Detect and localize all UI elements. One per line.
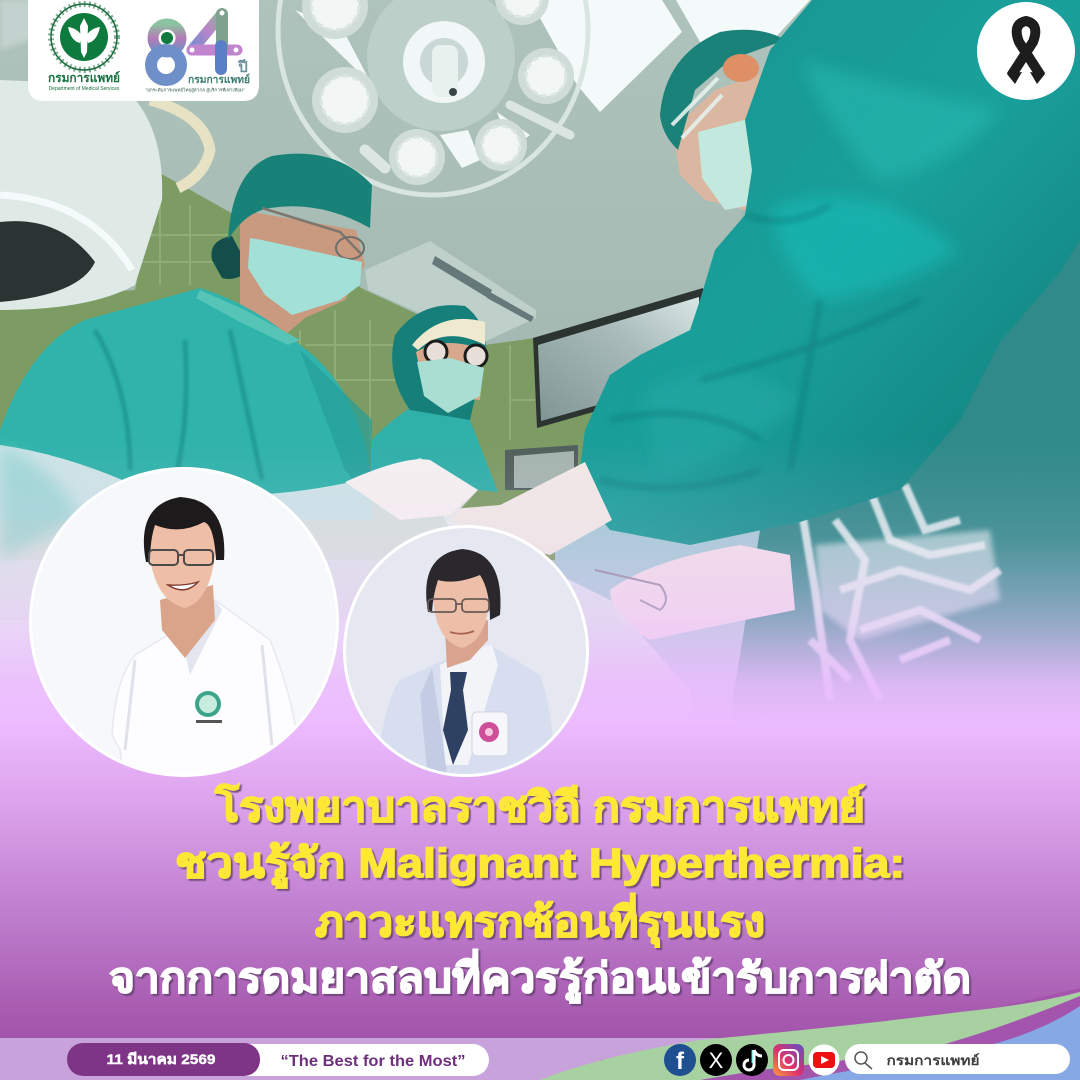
- logo: Ministry of Public Health: [48, 4, 120, 92]
- shirt badge: [195, 691, 221, 717]
- logo: 84 years: [146, 10, 250, 94]
- icon: facebook: f: [676, 1048, 685, 1075]
- neck and face: [445, 620, 488, 668]
- title line 3: ภาวะแทรกซ้อนที่รุนแรง: [315, 893, 765, 948]
- icon: YouTube: [808, 1044, 840, 1076]
- slogan: “The Best for the Most”: [280, 1053, 466, 1070]
- ceiling: [0, 0, 1080, 620]
- front left surgeon: [0, 154, 372, 520]
- glasses: [149, 550, 213, 565]
- logo: Ministry of Public Health: กรมการแพทย์: [48, 71, 120, 85]
- air conditioner unit: [365, 241, 536, 342]
- smile: [168, 582, 198, 590]
- right surgeon gown: [577, 0, 1080, 545]
- face: [160, 585, 215, 658]
- portrait: right doctor: [340, 520, 590, 790]
- tie: [443, 672, 468, 765]
- logo: 84 years: กรมการแพทย์: [188, 73, 250, 86]
- back surgeon gown: [372, 405, 498, 492]
- right surgeon lower body: [720, 225, 1080, 780]
- date and slogan pill: [67, 1043, 489, 1076]
- pocket badge: [472, 712, 508, 756]
- title: [109, 783, 971, 1004]
- title line 2: ชวนรู้จัก Malignant Hyperthermia:: [175, 840, 905, 889]
- date: 11 มีนาคม 2569: [106, 1051, 216, 1067]
- title line 4: จากการดมยาสลบที่ควรรู้ก่อนเข้ารับการผ่าตัด: [109, 949, 971, 1004]
- icon: facebook: [664, 1044, 696, 1076]
- date pill: [67, 1043, 260, 1076]
- ceiling light panels: [530, 0, 810, 112]
- back surgeon head: [392, 305, 487, 420]
- portrait: left doctor: [29, 467, 339, 777]
- mourning ribbon badge: [977, 2, 1075, 100]
- mouth: [450, 631, 474, 634]
- white coat: [381, 645, 552, 774]
- hair: [144, 497, 224, 562]
- white shirt: [112, 599, 296, 760]
- icon: magnifier: [855, 1052, 872, 1069]
- white glove over drape: [345, 459, 478, 520]
- search bar: [845, 1044, 1070, 1074]
- logo: 84 years: ปี: [237, 59, 248, 76]
- space below the right arm: [555, 490, 800, 720]
- logo: 84 years: "ยกระดับการแพทย์ไทยสู่สากล สู่บริการที่เท่าเทียม": [146, 86, 245, 94]
- search text: กรมการแพทย์: [886, 1053, 980, 1068]
- wall screen: [505, 288, 706, 490]
- green tiled wall: [0, 172, 760, 560]
- title line 1: โรงพยาบาลราชวิถี กรมการแพทย์: [214, 783, 865, 830]
- logo: Ministry of Public Health: Department of Medical Services: [49, 86, 120, 92]
- right surgeon head: [660, 30, 785, 210]
- background photo: operating room: [0, 0, 1080, 800]
- footer band: [0, 988, 1080, 1080]
- glasses: [428, 599, 489, 612]
- patient drape foreground: [0, 445, 700, 800]
- crinkled drape reflections: [800, 485, 1000, 700]
- icon: X: X: [709, 1048, 724, 1073]
- gloved hands: [440, 462, 795, 640]
- icon: TikTok: [736, 1044, 768, 1076]
- lower gradient background: [0, 722, 1080, 1038]
- surgical lamp: [278, 0, 588, 195]
- hair: [426, 549, 501, 620]
- fade overlay: [0, 440, 1080, 725]
- logo panel: [28, 0, 259, 101]
- imaging machine at top left: [0, 0, 210, 310]
- footer waves: [540, 988, 1080, 1080]
- icon: X: [700, 1044, 732, 1076]
- icon: Instagram: [773, 1044, 804, 1076]
